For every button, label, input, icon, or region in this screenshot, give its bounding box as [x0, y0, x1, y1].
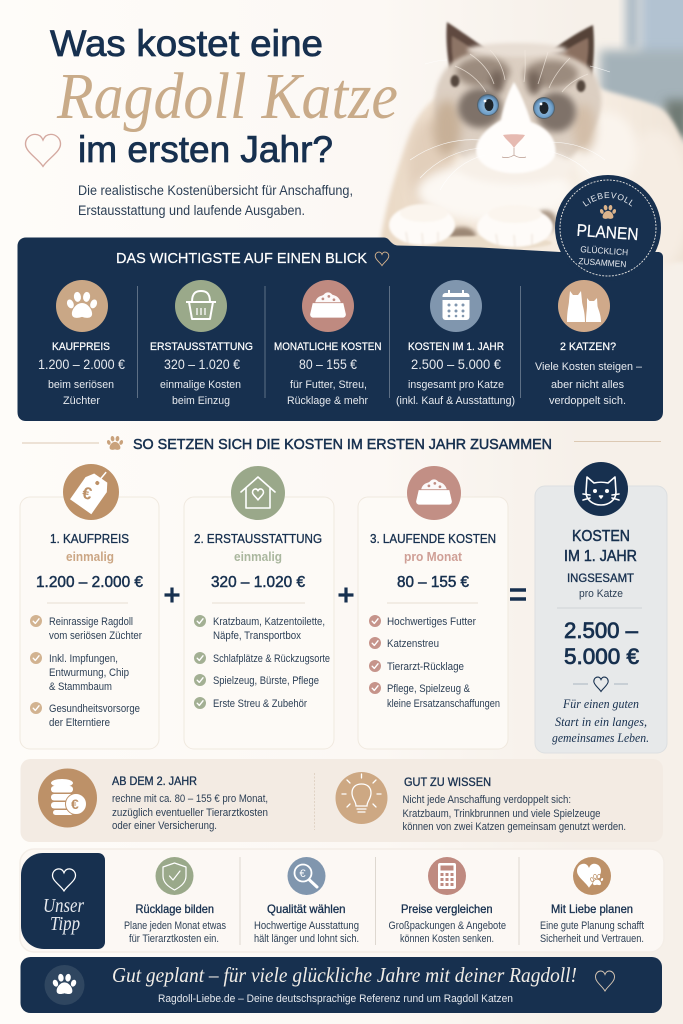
- icon: price tag: €: [81, 483, 94, 504]
- icon: heart with paw: [577, 864, 604, 888]
- icon: calculator: [438, 863, 456, 889]
- badge: unser Tipp: [21, 853, 105, 949]
- column: 2 Katzen: aber nicht alles: [551, 379, 624, 391]
- panel: tips: [20, 849, 664, 952]
- icon: outlined heart: [26, 134, 60, 166]
- panel: total: KOSTEN: [572, 528, 630, 545]
- column: Kosten im 1. Jahr: insgesamt pro Katze: [408, 379, 504, 391]
- panel: card Erstausstattung: [184, 466, 334, 749]
- badge: liebevoll planen: ZUSAMMEN: [578, 256, 627, 269]
- icon: plus: [164, 588, 180, 602]
- column: Erstausstattung: einmalige Kosten: [160, 379, 241, 391]
- list: Kaufpreis items: Reinrassige Ragdoll: [49, 616, 133, 628]
- panel: total: gemeinsames Leben.: [552, 730, 649, 745]
- tip: Qualität wählen: [254, 857, 359, 945]
- column: Kaufpreis: KAUFPREIS: [52, 341, 110, 353]
- icon: shield: [163, 863, 186, 890]
- section heading: [22, 436, 661, 453]
- panel: card Kaufpreis: 1.200 – 2.000 €: [36, 574, 143, 591]
- badge: unser Tipp: Tipp: [50, 913, 80, 935]
- tip: Mit Liebe planen: Sicherheit und Vertrauen.: [540, 933, 644, 945]
- block: gut zu wissen: Nicht jede Anschaffung verdoppelt sich:: [402, 794, 571, 806]
- panel: card Laufende Kosten: [358, 466, 508, 749]
- panel: footer: Ragdoll-Liebe.de – Deine deutschsprachige Referenz rund um Ragdoll Katzen: [158, 993, 513, 1005]
- fur strokes: [455, 50, 588, 92]
- panel: card Erstausstattung: einmalig: [234, 550, 282, 564]
- subtitle: Die realistische Kostenübersicht für Anschaffung,: [78, 183, 353, 198]
- column: Kosten im 1. Jahr: KOSTEN IM 1. JAHR: [408, 341, 504, 353]
- panel: card Erstausstattung: 320 – 1.020 €: [211, 574, 305, 591]
- block: ab dem 2. Jahr: [38, 768, 268, 832]
- subtitle: Erstausstattung und laufende Ausgaben.: [78, 203, 305, 218]
- icon: cat eye right: [533, 97, 555, 119]
- icon: light bulb: [342, 774, 381, 812]
- icon: paw badge: [44, 965, 84, 1005]
- badge: liebevoll planen: PLANEN: [576, 221, 639, 244]
- list: Kaufpreis items: vom seriösen Züchter: [49, 630, 142, 642]
- tip: Rücklage bilden: Rücklage bilden: [136, 902, 214, 916]
- block: ab dem 2. Jahr: zuzüglich eventueller Tierarztkosten: [112, 807, 268, 819]
- panel: card Laufende Kosten: pro Monat: [404, 550, 463, 564]
- list: Kaufpreis items: der Elterntiere: [49, 717, 110, 729]
- list: Kaufpreis items: Inkl. Impfungen,: [49, 653, 118, 665]
- column: Kosten im 1. Jahr: 2.500 – 5.000 €: [411, 357, 501, 372]
- column: Monatliche Kosten: für Futter, Streu,: [290, 379, 367, 391]
- title: Ragdoll Katze: [56, 60, 398, 133]
- column: Monatliche Kosten: Rücklage & mehr: [287, 395, 368, 407]
- badge: liebevoll planen: GLÜCKLICH: [580, 244, 629, 257]
- icon: two cats: [567, 291, 601, 322]
- block: gut zu wissen: Kratzbaum, Trinkbrunnen und viele Spielzeuge: [402, 808, 600, 820]
- panel: card Laufende Kosten: 3. LAUFENDE KOSTEN: [370, 532, 496, 546]
- icon: left ear: [446, 22, 496, 90]
- column: Erstausstattung: 320 – 1.020 €: [164, 357, 240, 372]
- list: Laufende Kosten items: kleine Ersatzanschaffungen: [387, 698, 500, 710]
- column: 2 Katzen: 2 KATZEN?: [560, 341, 616, 353]
- panel: total: 2.500 –: [564, 618, 638, 643]
- block: gut zu wissen: [336, 772, 626, 833]
- icon: price tag: [70, 464, 116, 514]
- column: Kaufpreis: [38, 280, 125, 407]
- badge: unser Tipp: Unser: [43, 895, 84, 917]
- tip: Qualität wählen: Qualität wählen: [267, 902, 346, 916]
- icon: equals: [510, 590, 526, 599]
- list: Erstausstattung items: Näpfe, Transportbox: [213, 630, 302, 642]
- photo: ragdoll cat: [378, 0, 683, 270]
- heading: DAS WICHTIGSTE AUF EINEN BLICK: [116, 251, 367, 267]
- icon: cat paw right: [477, 205, 553, 247]
- column: Monatliche Kosten: MONATLICHE KOSTEN: [274, 341, 382, 353]
- icon: house: [241, 477, 275, 508]
- panel: total: 5.000 €: [564, 644, 639, 669]
- panel: total: Start in ein langes,: [555, 714, 647, 729]
- panel: card Kaufpreis: einmalig: [66, 550, 114, 564]
- list: Erstausstattung items: Spielzeug, Bürste, Pflege: [213, 675, 319, 687]
- tip: Preise vergleichen: können Kosten senken.: [400, 933, 494, 945]
- tip: Mit Liebe planen: Mit Liebe planen: [551, 902, 633, 916]
- column: Kosten im 1. Jahr: (inkl. Kauf & Ausstattung): [396, 395, 515, 407]
- icon: coins: [51, 779, 86, 815]
- icon: basket: [186, 291, 216, 319]
- column: Erstausstattung: [150, 280, 253, 407]
- icon: cat face: [583, 477, 619, 505]
- list: Laufende Kosten items: [369, 615, 500, 710]
- column: Monatliche Kosten: [274, 280, 382, 407]
- panel: card Kaufpreis: 1. KAUFPREIS: [50, 532, 129, 546]
- panel: overview: [18, 238, 663, 421]
- panel: footer: [20, 957, 662, 1013]
- icon: small heart: [375, 252, 389, 266]
- subtitle: [78, 183, 353, 218]
- title: [50, 23, 398, 170]
- list: Kaufpreis items: Entwurmung, Chip: [49, 667, 129, 679]
- list: Erstausstattung items: Erste Streu & Zubehör: [213, 698, 307, 710]
- column: Kaufpreis: Züchter: [63, 395, 100, 407]
- column: 2 Katzen: verdoppelt sich.: [549, 395, 626, 407]
- column: Kaufpreis: 1.200 – 2.000 €: [38, 357, 125, 372]
- tip: Mit Liebe planen: Eine gute Planung schafft: [540, 920, 644, 932]
- column: 2 Katzen: Viele Kosten steigen –: [535, 361, 643, 373]
- icon: calendar: [442, 290, 470, 320]
- list: Kaufpreis items: [30, 615, 142, 729]
- tip: Rücklage bilden: [124, 857, 226, 945]
- panel: card Erstausstattung: 2. ERSTAUSSTATTUNG: [194, 532, 322, 546]
- column: 2 Katzen: [535, 280, 643, 407]
- column: Monatliche Kosten: 80 – 155 €: [299, 357, 357, 372]
- icon: cat eye left: [477, 94, 499, 116]
- panel: card Laufende Kosten: 80 – 155 €: [397, 574, 469, 591]
- list: Laufende Kosten items: Pflege, Spielzeug &: [387, 683, 471, 695]
- panel: total: INGSESAMT: [567, 573, 634, 585]
- tip: Mit Liebe planen: [540, 857, 644, 945]
- list: Kaufpreis items: & Stammbaum: [49, 681, 112, 693]
- list: Erstausstattung items: Schlafplätze & Rückzugsorte: [213, 653, 330, 665]
- tip: Preise vergleichen: Großpackungen & Angebote: [388, 920, 506, 932]
- list: Kaufpreis items: Gesundheitsvorsorge: [49, 703, 140, 715]
- tip: Rücklage bilden: für Tierarztkosten ein.: [129, 933, 219, 945]
- icon: magnifier: €: [300, 868, 306, 880]
- block: ab dem 2. Jahr: AB DEM 2. JAHR: [112, 774, 197, 788]
- icon: cat paw left: [389, 204, 455, 245]
- block: gut zu wissen: GUT ZU WISSEN: [404, 775, 491, 789]
- column: Erstausstattung: ERSTAUSSTATTUNG: [150, 341, 253, 353]
- section heading: SO SETZEN SICH DIE KOSTEN IM ERSTEN JAHR ZUSAMMEN: [133, 436, 552, 453]
- block: ab dem 2. Jahr: oder einer Versicherung.: [112, 820, 217, 832]
- tip: Preise vergleichen: Preise vergleichen: [401, 902, 493, 916]
- title: Was kostet eine: [50, 23, 323, 64]
- panel: total: [535, 462, 667, 753]
- panel: info strip: [20, 759, 663, 842]
- tip: Qualität wählen: hält länger und lohnt sich.: [254, 933, 359, 945]
- block: ab dem 2. Jahr: rechne mit ca. 80 – 155 € pro Monat,: [112, 793, 268, 805]
- badge: liebevoll planen: [555, 175, 661, 276]
- list: Erstausstattung items: Kratzbaum, Katzentoilette,: [213, 616, 325, 628]
- badge: liebevoll planen: LIEBEVOLL: [582, 192, 632, 206]
- icon: right ear: [544, 25, 594, 92]
- list: Laufende Kosten items: Tierarzt-Rücklage: [387, 661, 464, 673]
- icon: cat nose: [502, 134, 526, 158]
- panel: footer: Gut geplant – für viele glückliche Jahre mit deiner Ragdoll!: [112, 963, 577, 987]
- panel: total: pro Katze: [579, 588, 623, 600]
- tip: Preise vergleichen: [388, 857, 506, 945]
- list: Erstausstattung items: [194, 615, 330, 710]
- panel: total: Für einen guten: [562, 696, 639, 711]
- column: Erstausstattung: beim Einzug: [172, 395, 230, 407]
- title: im ersten Jahr?: [78, 129, 333, 170]
- tip: Qualität wählen: Hochwertige Ausstattung: [254, 920, 359, 932]
- block: gut zu wissen: können von zwei Katzen gemeinsam genutzt werden.: [402, 821, 626, 833]
- icon: plus: [338, 588, 354, 602]
- column: Kosten im 1. Jahr: [396, 280, 515, 407]
- whiskers: [410, 60, 610, 190]
- panel: card Kaufpreis: [20, 464, 159, 749]
- tip: Rücklage bilden: Plane jeden Monat etwas: [124, 920, 226, 932]
- icon: coins: €: [71, 796, 79, 812]
- panel: total: IM 1. JAHR: [564, 548, 637, 565]
- list: Laufende Kosten items: Hochwertiges Futter: [387, 616, 476, 628]
- list: Laufende Kosten items: Katzenstreu: [387, 638, 439, 650]
- column: Kaufpreis: beim seriösen: [48, 379, 114, 391]
- icon: footer heart: [596, 971, 614, 991]
